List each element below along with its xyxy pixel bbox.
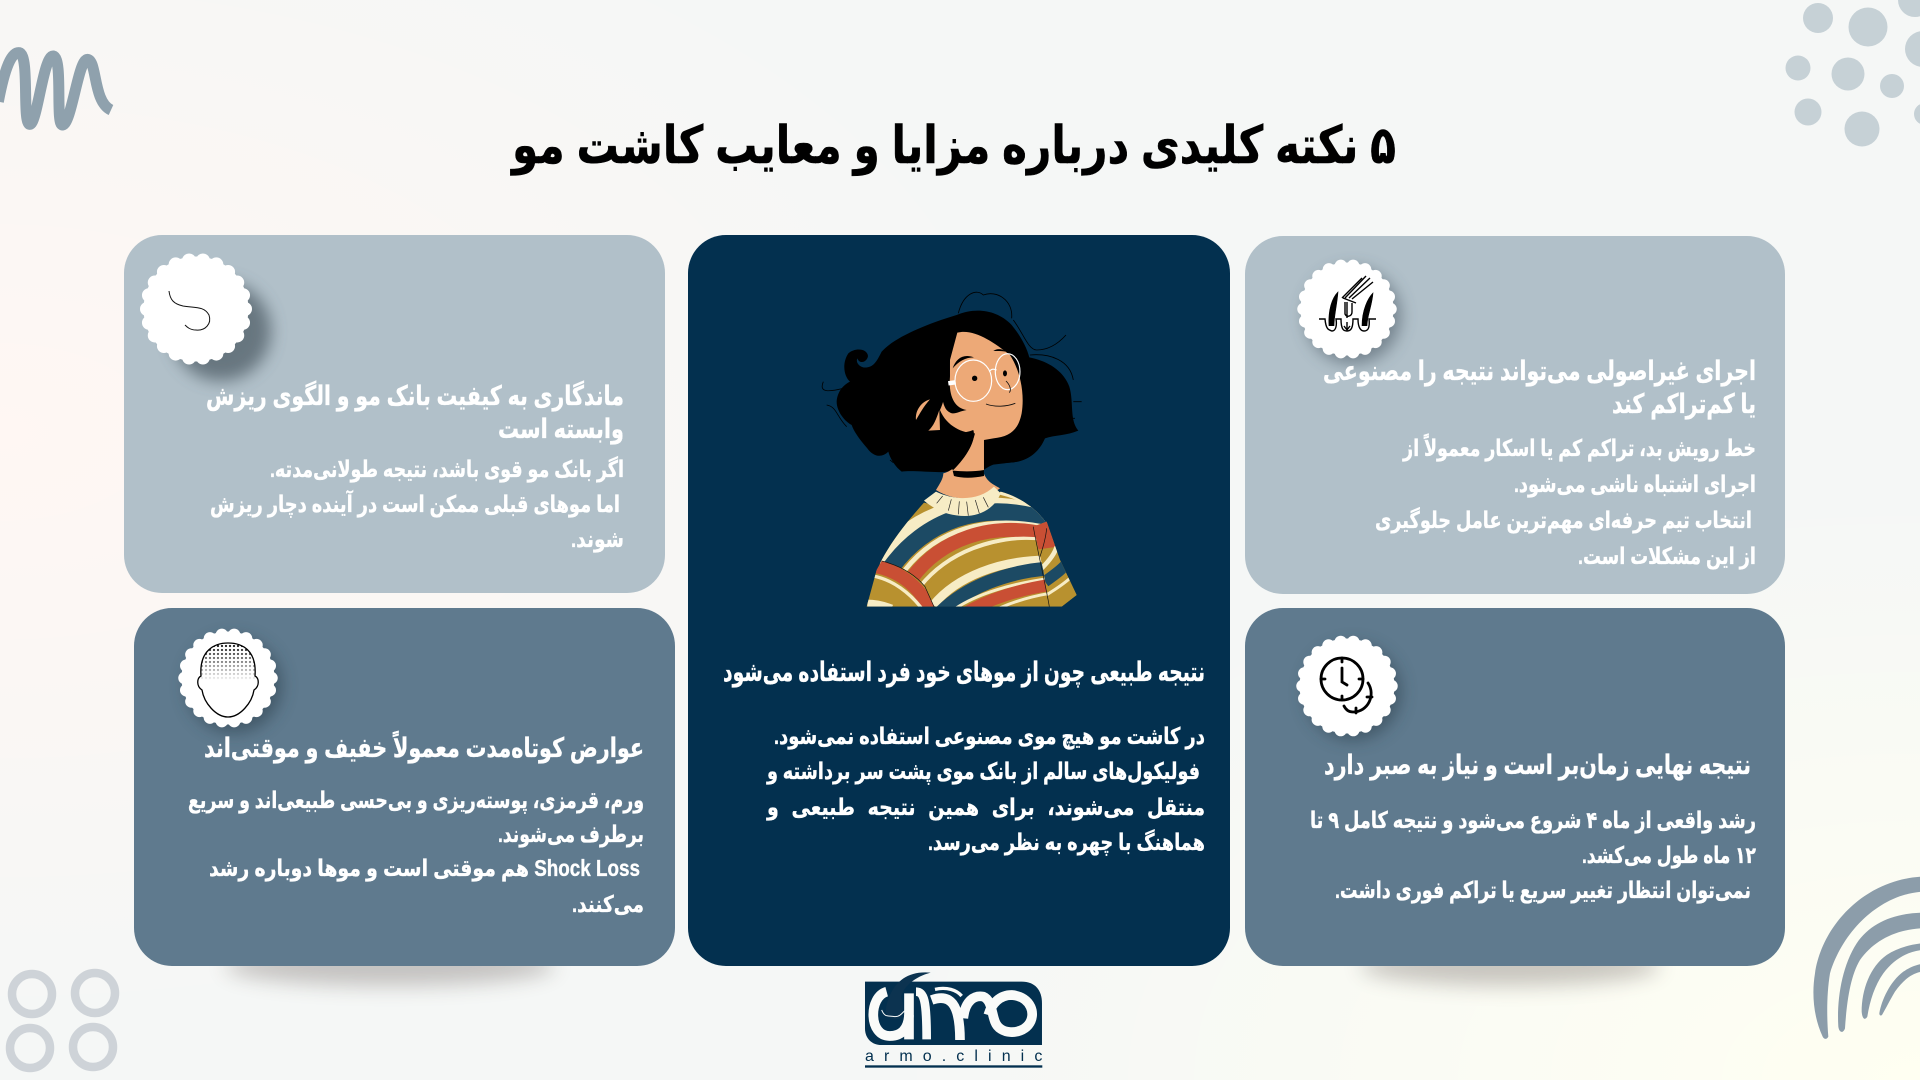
badge shadow xyxy=(171,281,271,381)
logo caption: armo.clinic xyxy=(865,1048,1042,1065)
hair lock below jaw xyxy=(927,413,974,470)
card body text: از این مشکلات است. xyxy=(1578,543,1756,570)
card heading: نتیجه نهایی زمان‌بر است و نیاز به صبر دارد xyxy=(1324,750,1751,781)
panel: natural result centre xyxy=(688,235,1230,966)
glasses xyxy=(948,354,1020,401)
card body text xyxy=(1310,807,1756,904)
card body text: نمی‌توان انتظار تغییر سریع یا تراکم فوری داشت. xyxy=(1335,877,1751,904)
card body text: انتخاب تیم حرفه‌ای مهم‌ترین عامل جلوگیری xyxy=(1375,507,1752,534)
hair lobe behind neck on the right xyxy=(980,430,1047,470)
card body text: اگر بانک مو قوی باشد، نتیجه طولانی‌مدته. xyxy=(270,456,624,483)
bangs over the temple xyxy=(942,358,967,413)
card background xyxy=(124,235,665,593)
card body text: ورم، قرمزی، پوسته‌ریزی و بی‌حسی طبیعی‌اند و سریع xyxy=(188,787,644,814)
panel: patience for final result xyxy=(1245,608,1785,966)
ear sliver xyxy=(916,399,940,431)
ribbed collar xyxy=(924,487,1001,516)
panel: improper execution xyxy=(1245,236,1785,594)
card heading: اجرای غیراصولی می‌تواند نتیجه را مصنوعی xyxy=(1323,356,1756,387)
card body text: اجرای اشتباه ناشی می‌شود. xyxy=(1514,471,1756,498)
sweater seams xyxy=(882,527,1049,607)
card body text xyxy=(766,723,1205,856)
decoration: squiggle top left xyxy=(0,53,111,125)
card body text: اما موهای قبلی ممکن است در آینده دچار ریزش xyxy=(210,489,620,518)
black hair mass xyxy=(837,311,1078,472)
card heading: یا کم‌تراکم کند xyxy=(1612,389,1756,420)
choker xyxy=(953,470,984,478)
icon badge: single hair xyxy=(144,256,248,362)
card heading xyxy=(1323,356,1756,420)
shadow beneath bottom left card xyxy=(225,946,555,986)
card body text xyxy=(188,787,644,917)
badge shadow xyxy=(1305,644,1401,740)
eyes nose and mouth xyxy=(972,370,1015,406)
illustration: woman with curly hair and striped sweater xyxy=(822,292,1082,613)
card body text: هماهنگ با چهره به نظر می‌رسد. xyxy=(928,829,1205,856)
stray hairs xyxy=(822,292,1082,463)
card body text: می‌کنند. xyxy=(572,891,644,917)
decoration: rings bottom left xyxy=(10,973,115,1068)
card body text: فولیکول‌های سالم از بانک موی پشت سر برداشته و xyxy=(766,758,1200,785)
panel: side effects xyxy=(134,608,675,966)
decoration: dots top right xyxy=(1786,0,1920,146)
eyebrows xyxy=(953,349,1007,368)
card heading: عوارض کوتاه‌مدت معمولاً خفیف و موقتی‌اند xyxy=(204,730,644,764)
card heading: وابسته است xyxy=(498,414,624,445)
card background xyxy=(1245,236,1785,594)
logo: armo clinic xyxy=(865,972,1042,1068)
card body text: برطرف می‌شوند. xyxy=(498,821,644,848)
card body text: ۱۲ ماه طول می‌کشد. xyxy=(1582,842,1756,869)
badge shadow xyxy=(186,637,282,733)
logo letters xyxy=(873,988,1032,1040)
icon badge: clocks xyxy=(1300,638,1394,734)
panel: hair bank retention xyxy=(124,235,665,593)
card background xyxy=(1245,608,1785,966)
badge shadow xyxy=(1305,268,1401,364)
title: ۵ نکته کلیدی درباره مزایا و معایب کاشت مو xyxy=(510,117,1396,176)
card body text: خط رویش بد، تراکم کم یا اسکار معمولاً از xyxy=(1402,434,1756,462)
card body text: منتقل می‌شوند، برای همین نتیجه طبیعی و xyxy=(766,794,1205,821)
icon badge: head with hair density xyxy=(182,632,274,724)
card body text xyxy=(1375,434,1756,570)
card body text xyxy=(210,456,624,553)
card body text: رشد واقعی از ماه ۴ شروع می‌شود و نتیجه کامل ۹ تا xyxy=(1310,807,1756,834)
decoration: arcs bottom right xyxy=(1813,877,1920,1039)
card heading xyxy=(206,380,624,445)
right sleeve xyxy=(1034,522,1076,607)
card body text: در کاشت مو هیچ موی مصنوعی استفاده نمی‌شود. xyxy=(774,723,1205,750)
sweater body xyxy=(866,492,1076,607)
card background xyxy=(688,235,1230,966)
icon badge: follicles and extraction tool xyxy=(1300,262,1394,356)
card background xyxy=(134,608,675,966)
logo background shape xyxy=(865,982,1042,1045)
shadow beneath bottom right card xyxy=(1360,946,1660,986)
card heading: ماندگاری به کیفیت بانک مو و الگوی ریزش xyxy=(206,380,624,412)
card body text: شوند. xyxy=(571,526,624,553)
logo underline xyxy=(865,1065,1042,1068)
card heading: نتیجه طبیعی چون از موهای خود فرد استفاده می‌شود xyxy=(723,657,1205,688)
card body text: Shock Loss هم موقتی است و موها دوباره رشد xyxy=(209,855,640,882)
logo hair follicle xyxy=(882,972,931,1019)
left sleeve xyxy=(866,561,934,607)
skin: neck and face xyxy=(936,332,1023,499)
